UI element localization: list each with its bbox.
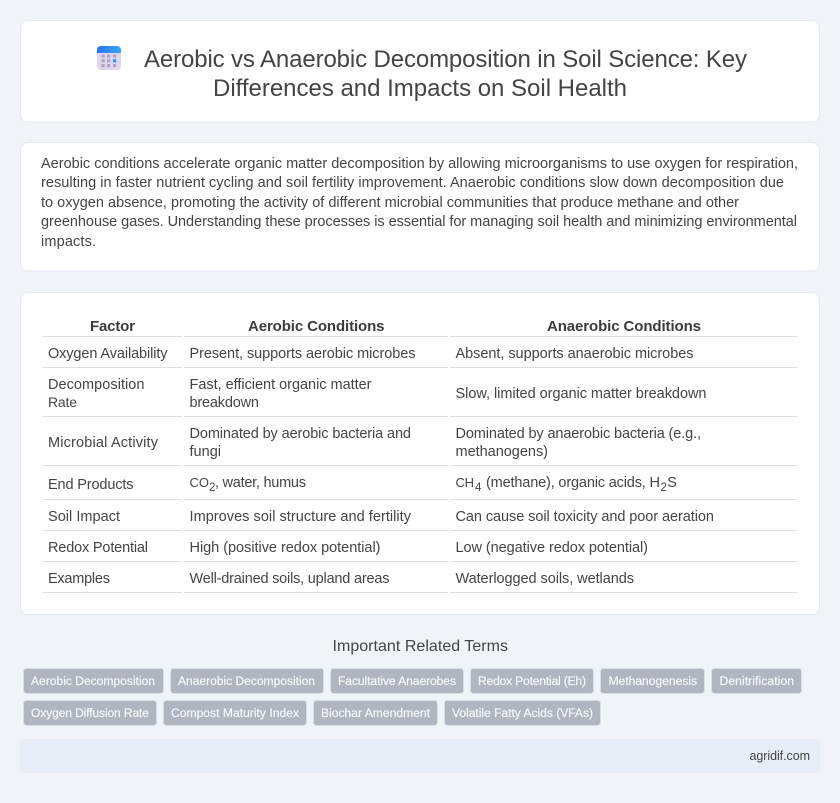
tag: denitrification: Denitrification — [720, 674, 794, 688]
table row: redox potential: Low (negative redox potential) — [456, 540, 648, 556]
tag: redox potential: Redox Potential (Eh) — [478, 674, 586, 688]
table row: end products — [48, 475, 677, 494]
text block: introduction paragraph — [41, 156, 798, 250]
table row: redox potential: Redox Potential — [48, 540, 148, 556]
table row: end products: S — [667, 475, 677, 491]
table header row: Aerobic Conditions — [248, 318, 384, 335]
tag: denitrification — [712, 668, 802, 694]
tag: biochar amendment: Biochar Amendment — [321, 706, 431, 720]
tag: biochar amendment — [314, 700, 438, 726]
table row: decomposition rate: Slow, limited organic matter breakdown — [456, 386, 706, 402]
table row: redox potential: High (positive redox potential) — [190, 540, 380, 556]
table row: end products: CO — [190, 475, 209, 490]
table row: examples: Well-drained soils, upland areas — [190, 571, 390, 587]
footer — [20, 739, 820, 773]
text block: introduction paragraph: greenhouse gases. Understanding these processes is essential for managing soil health and minimizing environmental — [41, 214, 797, 230]
text block: introduction paragraph: to oxygen absence, promoting the activity of different microbial communities that produce methane and other — [41, 195, 739, 211]
table row: end products: CH — [456, 475, 474, 490]
table row: soil impact: Soil Impact — [48, 509, 120, 525]
table row: microbial activity: Dominated by aerobic bacteria and — [190, 426, 411, 442]
table row: end products: (methane), organic acids, H — [486, 475, 660, 491]
table row: soil impact: Can cause soil toxicity and poor aeration — [456, 509, 714, 525]
table row: oxygen availability: Present, supports aerobic microbes — [190, 346, 416, 362]
tag: compost maturity index: Compost Maturity Index — [171, 706, 299, 720]
text block: introduction paragraph: impacts. — [41, 234, 96, 250]
table row: decomposition rate: Fast, efficient organic matter — [190, 377, 372, 393]
table row: end products: 2 — [209, 482, 215, 494]
tag: anaerobic decomposition — [170, 668, 324, 694]
title — [144, 46, 747, 102]
table row: end products: , water, humus — [215, 475, 306, 491]
tag: aerobic decomposition — [24, 668, 164, 694]
table row: decomposition rate: Rate — [48, 394, 77, 410]
tag: volatile fatty acids — [444, 700, 600, 726]
footer: agridif.com — [750, 749, 810, 763]
table row: examples — [48, 571, 634, 587]
text block: introduction paragraph: resulting in faster nutrient cycling and soil fertility improvement. Anaerobic conditions slow down decomposition due — [41, 175, 784, 191]
table row: oxygen availability — [48, 346, 694, 362]
tag: volatile fatty acids: Volatile Fatty Acids (VFAs) — [452, 706, 593, 720]
table row: oxygen availability: Oxygen Availability — [48, 346, 168, 362]
table header row: Anaerobic Conditions — [547, 318, 701, 335]
tag: methanogenesis: Methanogenesis — [608, 674, 697, 688]
table row: soil impact: Improves soil structure and fertility — [190, 509, 412, 525]
tag: redox potential — [470, 668, 594, 694]
panel: header — [20, 20, 820, 122]
table row: microbial activity: methanogens) — [456, 444, 548, 460]
table row: oxygen availability: Absent, supports anaerobic microbes — [456, 346, 694, 362]
title: Differences and Impacts on Soil Health — [213, 75, 627, 102]
table row: microbial activity: Microbial Activity — [48, 435, 159, 451]
tag: oxygen diffusion rate — [24, 700, 156, 726]
table row: decomposition rate: Decomposition — [48, 377, 144, 393]
table row: end products: 2 — [660, 482, 667, 494]
title: Aerobic vs Anaerobic Decomposition in Soil Science: Key — [144, 46, 747, 73]
table row: decomposition rate — [48, 377, 706, 411]
table row: redox potential — [48, 540, 648, 556]
tag: compost maturity index — [164, 700, 306, 726]
table row: decomposition rate: breakdown — [190, 395, 259, 411]
table row: end products: End Products — [48, 477, 134, 493]
table header row — [90, 318, 701, 335]
related terms tags — [24, 668, 802, 726]
heading: related terms: Important Related Terms — [332, 638, 508, 655]
tag: anaerobic decomposition: Anaerobic Decomposition — [178, 674, 315, 688]
panel: comparison table — [20, 292, 820, 614]
table row: soil impact — [48, 509, 714, 525]
icon: calendar — [97, 46, 121, 70]
table row: microbial activity: Dominated by anaerobic bacteria (e.g., — [456, 426, 701, 442]
tag: facultative anaerobes — [330, 668, 464, 694]
tag: methanogenesis — [600, 668, 704, 694]
tag: oxygen diffusion rate: Oxygen Diffusion Rate — [31, 706, 149, 720]
table row: microbial activity — [48, 426, 701, 460]
table row: examples: Waterlogged soils, wetlands — [456, 571, 634, 587]
table row: end products: 4 — [475, 482, 482, 494]
table row: examples: Examples — [48, 571, 110, 587]
tag: facultative anaerobes: Facultative Anaerobes — [338, 674, 456, 688]
panel: introduction — [20, 142, 820, 271]
table header row: Factor — [90, 318, 135, 335]
text block: introduction paragraph: Aerobic conditions accelerate organic matter decomposition by allowing microorganisms to use oxygen for respiration, — [41, 156, 798, 172]
table row: microbial activity: fungi — [190, 444, 221, 460]
tag: aerobic decomposition: Aerobic Decomposition — [31, 674, 155, 688]
